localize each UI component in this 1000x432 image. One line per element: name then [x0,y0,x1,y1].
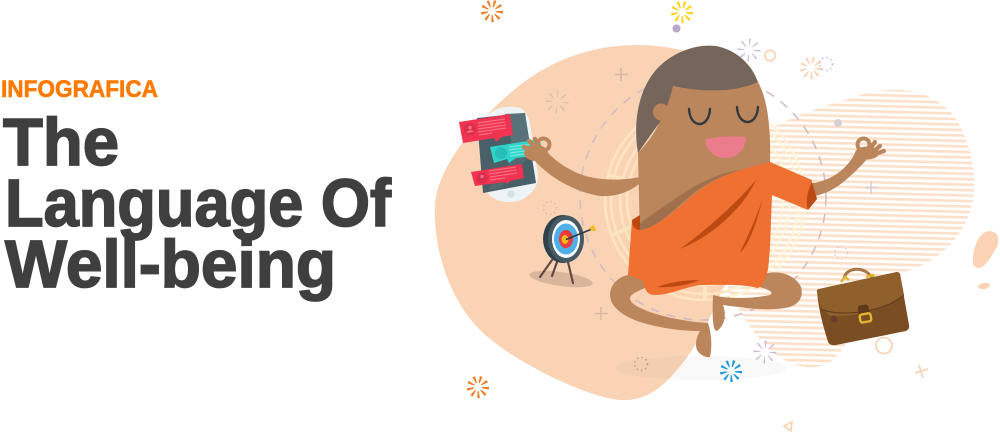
icon: briefcase [817,269,909,345]
right leg [713,272,802,331]
plus signs and shapes [595,50,928,431]
title: The [3,105,119,180]
dotted bursts [544,58,848,370]
dashed orbit circle [580,74,826,320]
body and head [638,82,770,240]
title: Language Of [5,166,392,241]
title: Well-being [5,227,336,302]
left hand [524,138,550,161]
mandala rings over stripes [730,122,806,298]
right arm [805,153,868,197]
hair [636,46,758,153]
ear [653,104,669,120]
red message bubble [471,164,524,186]
teal message bubble [490,139,543,163]
sleeve inner [807,182,817,210]
peach background blob [435,45,745,400]
title [3,105,392,302]
right hand [855,138,884,160]
icon: archery target [528,215,596,290]
mouth [706,136,746,158]
striped background blob [728,90,974,367]
red message bubble [459,114,513,143]
orange robe [628,162,812,295]
robe folds [657,180,763,287]
dots [537,24,842,282]
icon: phone with chat bubbles [459,107,543,202]
decorative bursts [470,4,818,394]
left arm [534,153,640,196]
floor shadow [616,356,788,380]
peach drops [973,231,998,290]
eyes [689,107,758,124]
heading label: INFOGRAFICA [1,76,158,103]
monk figure [524,46,884,357]
left leg [610,275,711,357]
neck collar shadow [640,170,740,230]
mandala rings [604,126,730,301]
